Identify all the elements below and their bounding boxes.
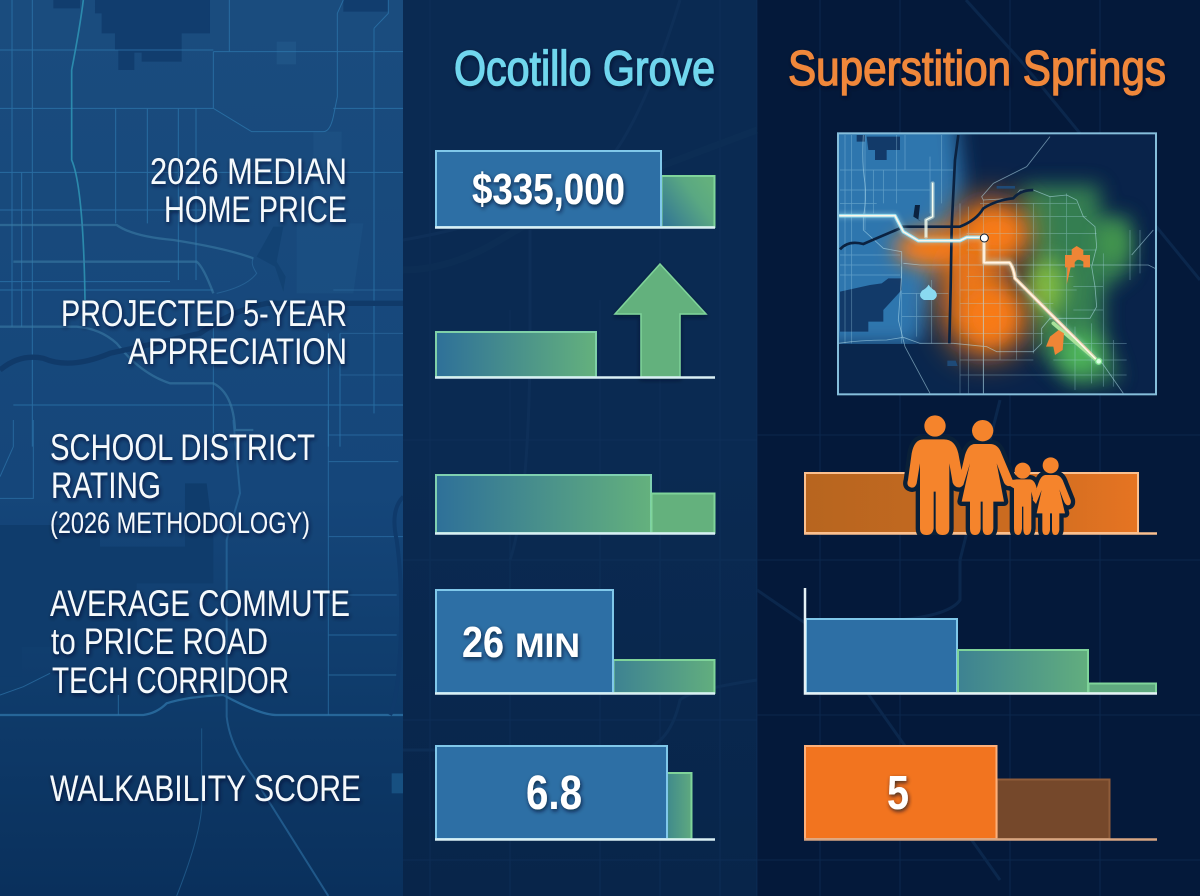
icon: mission building marker (1065, 246, 1090, 285)
icon: rock marker (1046, 330, 1064, 355)
panel: left label column background (0, 0, 403, 896)
map: green zone (1020, 185, 1130, 387)
value: price: $335,000 (472, 165, 625, 214)
icon: family of four (907, 415, 1071, 535)
value: commute: MIN (515, 627, 580, 665)
label: school district rating (50, 426, 315, 540)
chart: Ocotillo school rating (435, 475, 715, 534)
value: commute: 26 (462, 618, 504, 667)
label: average commute: TECH CORRIDOR (52, 659, 289, 701)
map: arterial roads (838, 135, 1155, 393)
background street map: middle and right panels (403, 0, 1200, 896)
label: school district rating: SCHOOL DISTRICT (50, 426, 315, 468)
chart: Superstition walkability (804, 746, 1157, 840)
background street map: left panel (0, 0, 403, 896)
label: 2026 median home price (150, 150, 347, 230)
icon: water drop marker (920, 285, 937, 300)
panel: Ocotillo Grove column background (403, 0, 757, 896)
map: dark regions (840, 135, 902, 332)
label: projected 5-year appreciation (61, 292, 347, 372)
value: walkability: 6.8 (526, 767, 582, 820)
chart: Ocotillo commute (435, 590, 715, 694)
baseline: appreciation axis (435, 376, 715, 379)
value: walkability: 5 (887, 767, 909, 820)
map: street grid (840, 135, 1140, 393)
label: school district rating: RATING (51, 464, 161, 506)
panel: Superstition Springs column background (757, 0, 1200, 896)
map: transit end node (1096, 358, 1102, 364)
title: Ocotillo Grove: Ocotillo Grove (454, 42, 715, 96)
label: projected 5-year appreciation: PROJECTED 5-YEAR (61, 292, 347, 334)
chart: Ocotillo median home price (435, 151, 715, 228)
chart: Ocotillo projected appreciation (436, 264, 706, 377)
label: walkability score: WALKABILITY SCORE (50, 767, 361, 809)
label: school district rating: (2026 METHODOLOGY) (50, 507, 310, 540)
chart: Ocotillo walkability (435, 746, 715, 840)
map: Superstition Springs heat map (837, 132, 1157, 396)
icon: family figures (907, 415, 1071, 535)
chart: Superstition school rating (804, 473, 1157, 534)
label: 2026 median home price: 2026 MEDIAN (150, 150, 347, 192)
label: average commute: AVERAGE COMMUTE (50, 582, 350, 624)
label: average commute (50, 582, 350, 701)
map: dark freeway (840, 135, 1033, 343)
chart: Superstition commute (805, 588, 1157, 694)
value: commute (462, 618, 580, 667)
label: projected 5-year appreciation: APPRECIATION (128, 330, 347, 372)
label: average commute: to PRICE ROAD (51, 620, 268, 662)
map: blue zone (839, 134, 976, 344)
map: frame (838, 133, 1156, 394)
map: transit hub node (980, 234, 988, 242)
map: glowing transit line (838, 183, 1098, 362)
label: 2026 median home price: HOME PRICE (164, 188, 347, 230)
map: orange heat zone (895, 200, 1030, 357)
arrow: upward appreciation (615, 264, 706, 377)
